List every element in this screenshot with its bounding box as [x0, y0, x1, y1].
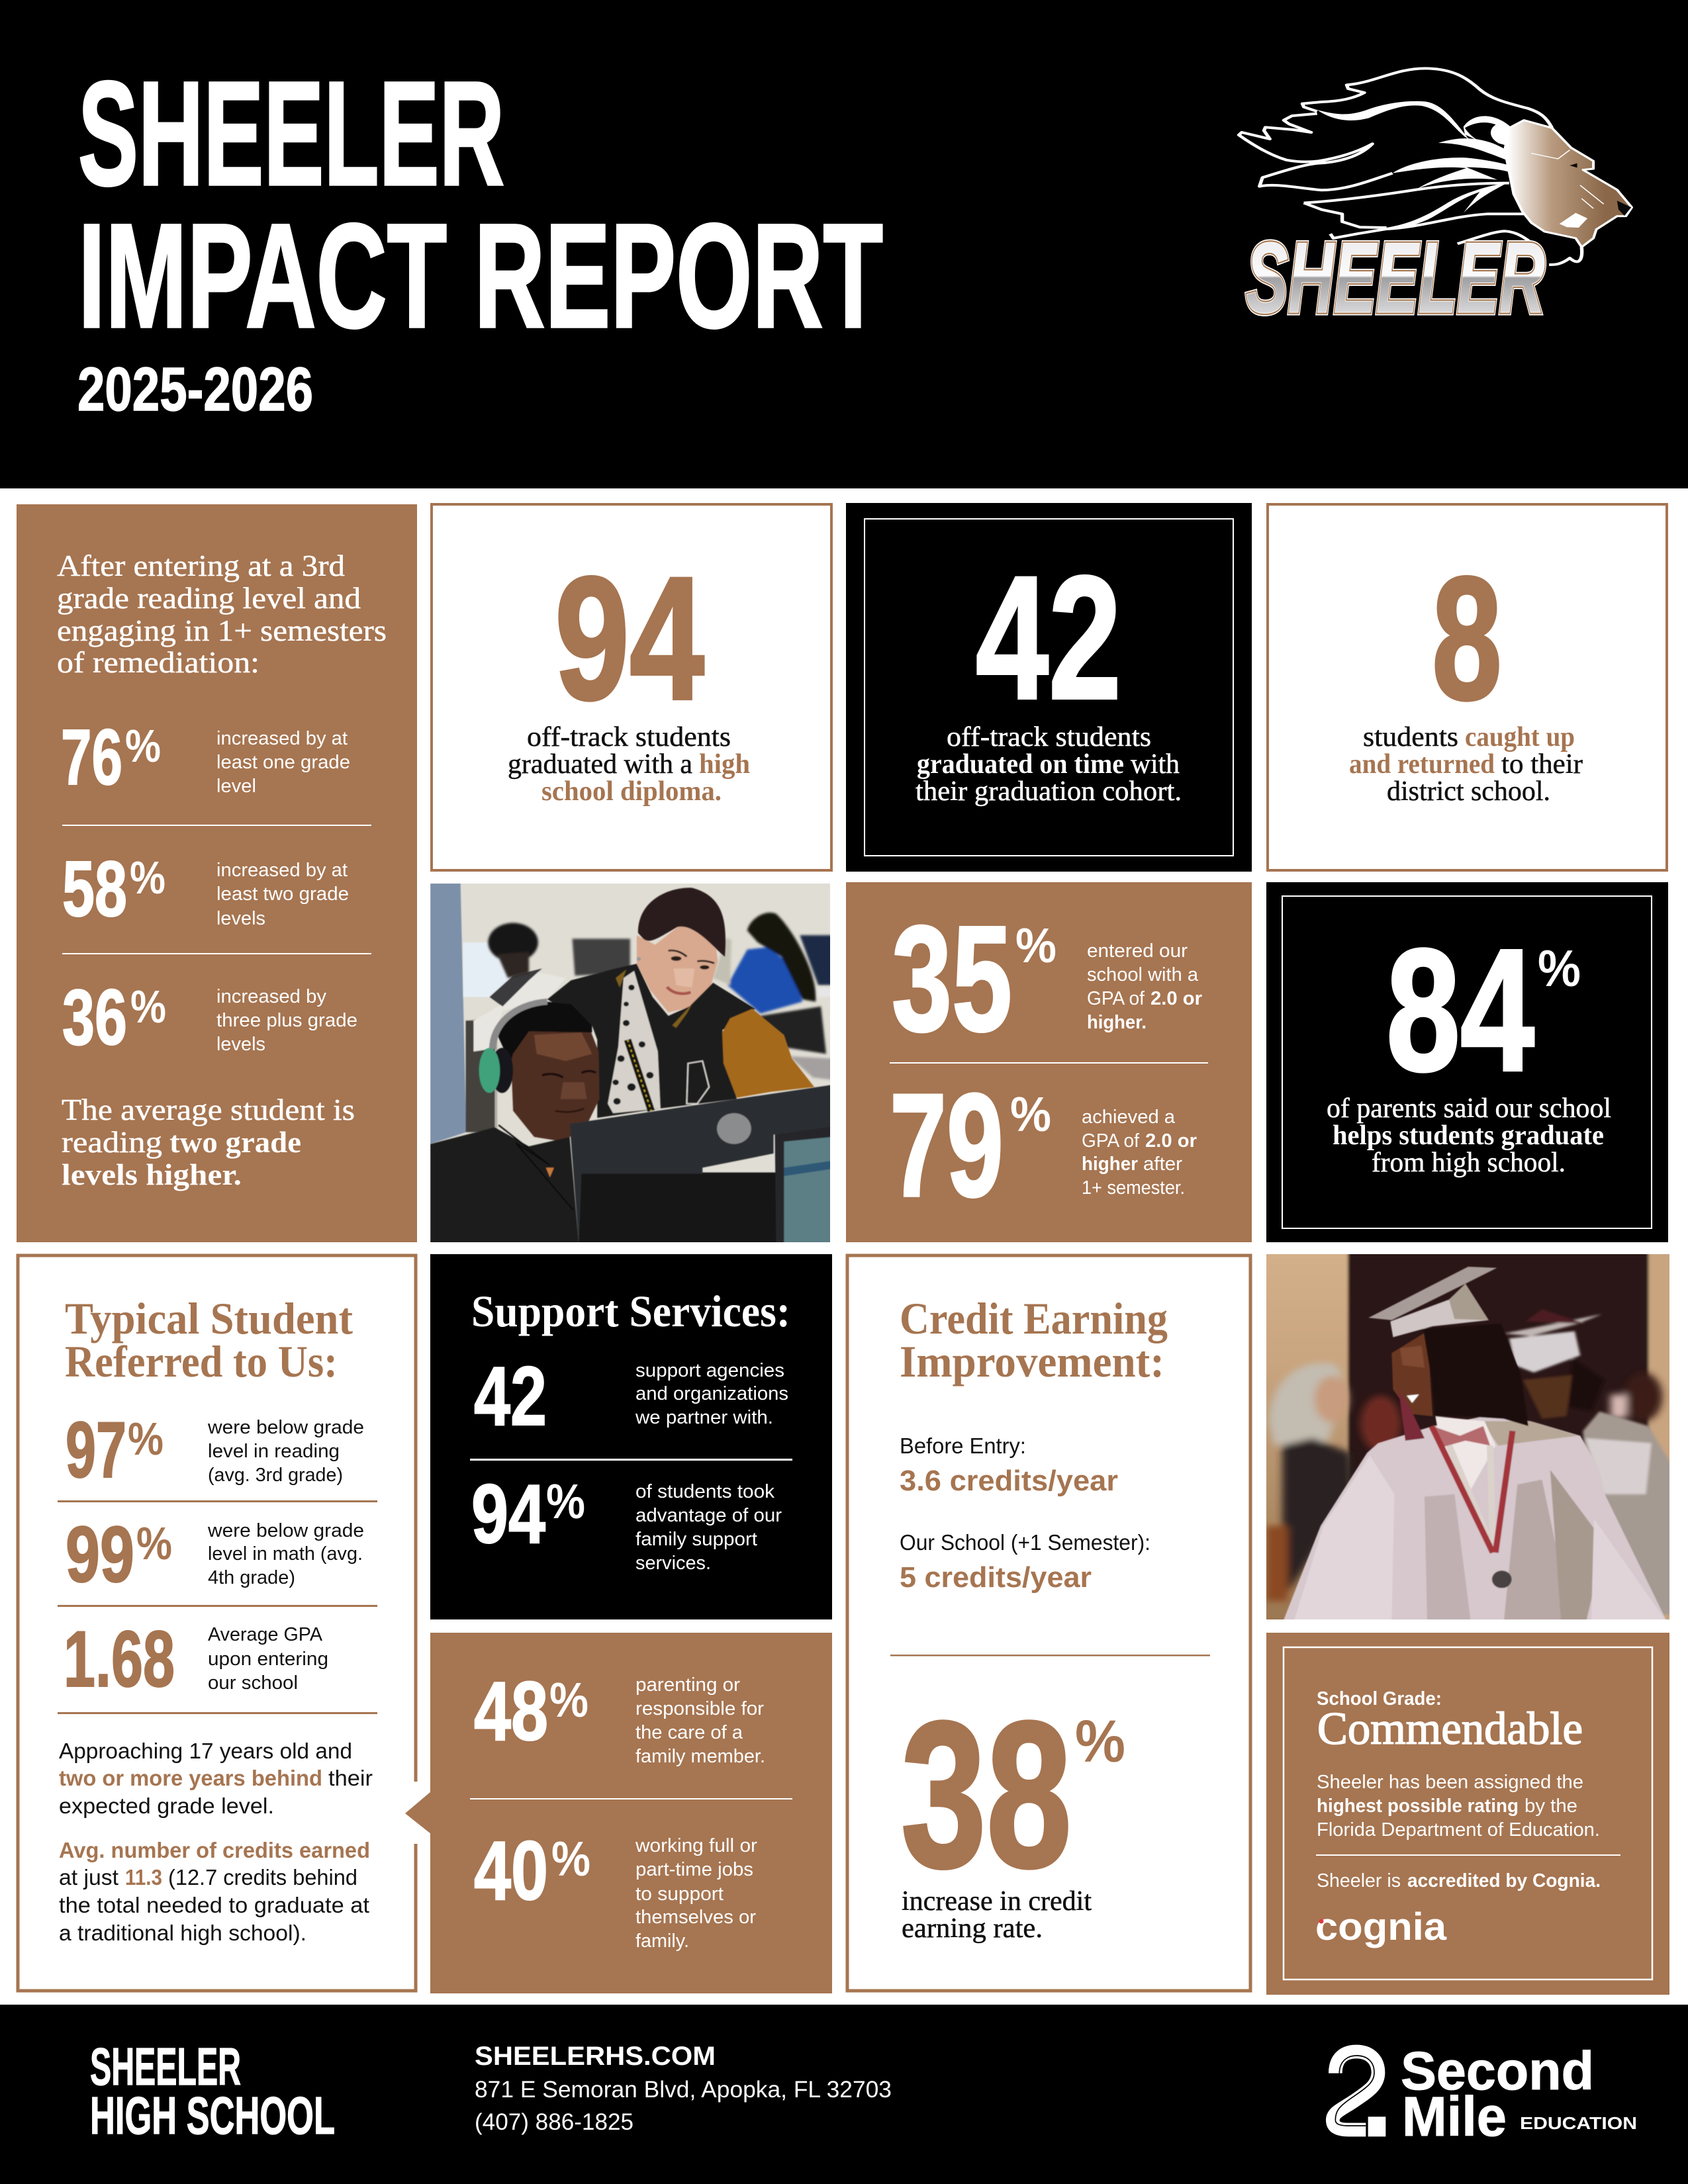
text: average student: two grade: [169, 1125, 301, 1159]
text: our school: 5 credits/year: [900, 1561, 1092, 1594]
text: our school: Our School (+1 Semester):: [900, 1530, 1150, 1555]
footer: school name: HIGH SCHOOL: [90, 2086, 335, 2145]
text: caught up: students: [1363, 722, 1458, 752]
text: age and years behind: two or more years behind: [59, 1766, 322, 1790]
stat: 42 agencies: and organizations: [635, 1383, 788, 1404]
stat: 94% family support: advantage of our: [635, 1505, 782, 1526]
stat: 94% family support: [471, 1467, 782, 1574]
stat: 36%: %: [130, 981, 166, 1032]
footer: contact details: 871 E Semoran Blvd, Apopka, FL 32703: [475, 2077, 892, 2103]
stat: 35%: entered our: [1087, 940, 1188, 962]
text: credits earned: Avg. number of credits earned: [59, 1838, 370, 1862]
panel: reading gains: [17, 504, 417, 1242]
text: caught up: [1349, 722, 1583, 807]
stat: 42 agencies: 42: [474, 1349, 547, 1443]
number: 42: 42: [976, 540, 1121, 736]
heading: reading gains: engaging in 1+ semesters: [57, 614, 387, 647]
text: caught up: to their: [1501, 749, 1583, 780]
stat: 58%: [62, 845, 349, 933]
text: parents: from high school.: [1372, 1148, 1566, 1178]
text: parents: [1327, 1093, 1611, 1178]
stat: 35%: higher.: [1087, 1012, 1147, 1033]
text: highest rating: Florida Department of Education.: [1317, 1819, 1600, 1841]
stat: 94% family support: of students took: [635, 1481, 775, 1502]
heading: credit earning: [900, 1293, 1168, 1387]
footer: contact details: SHEELERHS.COM: [475, 2042, 716, 2071]
stat: 48%: the care of a: [635, 1722, 743, 1743]
stat: 79%: GPA of: [1082, 1130, 1140, 1152]
stat: 79%: 2.0 or: [1145, 1130, 1197, 1152]
stat: 76%: 76: [61, 713, 122, 801]
photo: teacher helping student at computer: [430, 883, 834, 1246]
stat: 76%: [61, 713, 350, 801]
stat: 1.68 GPA: our school: [208, 1672, 298, 1694]
stat: 40%: part-time jobs: [635, 1859, 753, 1880]
text: increase in credit earning: earning rate.: [902, 1913, 1043, 1944]
text: school grade: School Grade:: [1317, 1688, 1442, 1709]
stat: 58%: %: [130, 852, 165, 903]
stat: 94% family support: services.: [635, 1553, 711, 1574]
text: average student: levels higher.: [62, 1158, 242, 1191]
logo: Sheeler lion: [1239, 68, 1632, 334]
stat: 58%: 58: [62, 845, 127, 933]
text: increase in credit earning: [902, 1886, 1092, 1944]
panel: school grade: [1266, 1633, 1669, 1995]
stat: 58%: least two grade: [216, 884, 349, 905]
stat: 94% family support: %: [546, 1474, 585, 1529]
text: off-track graduates: high: [699, 749, 750, 780]
title: SHEELER: [78, 51, 504, 216]
logo: Cognia: cognia: [1315, 1905, 1447, 1948]
text: off-track graduates: graduated with a: [508, 749, 692, 780]
text: on-time graduates: [915, 722, 1182, 807]
stat: 40%: [474, 1824, 757, 1952]
stat: 79%: [890, 1064, 1197, 1228]
stat: 35%: 2.0 or: [1150, 988, 1202, 1009]
stat: 40%: family.: [635, 1931, 689, 1952]
stat: 40%: %: [551, 1831, 590, 1886]
heading: reading gains: grade reading level and: [57, 581, 361, 615]
stat: 48%: %: [549, 1672, 588, 1727]
text: increase in credit earning: increase in credit: [902, 1886, 1092, 1917]
header band: [0, 0, 1688, 488]
text: accreditation: accredited by Cognia.: [1407, 1870, 1601, 1891]
text: parents: helps students graduate: [1333, 1120, 1604, 1151]
stat: 99%: 4th grade): [208, 1567, 295, 1588]
stat: 58%: increased by at: [216, 860, 348, 881]
panel: GPA stats: [846, 882, 1252, 1242]
text: age and years behind: expected grade level.: [59, 1794, 274, 1818]
stat: 36%: [62, 974, 357, 1062]
text: off-track graduates: [508, 722, 750, 807]
text: average student: [62, 1093, 355, 1191]
logo: Second Mile Education: Second: [1401, 2041, 1594, 2101]
stat: 48%: 48: [474, 1664, 548, 1758]
icon: second mile mark: [1333, 2052, 1385, 2136]
text: average student: reading: [62, 1125, 162, 1159]
stat: 99%: level in math (avg.: [208, 1543, 363, 1565]
stat: 48%: [474, 1664, 765, 1767]
text: before entry: Before Entry:: [900, 1433, 1026, 1458]
stat: 97%: level in reading: [208, 1441, 340, 1462]
stat: 35%: [892, 895, 1202, 1063]
text: on-time graduates: with: [1131, 749, 1180, 780]
stat: 97%: %: [128, 1413, 164, 1465]
heading: credit earning: Improvement:: [900, 1336, 1164, 1387]
number: 38%: %: [1075, 1709, 1125, 1775]
stat: 99%: 99: [66, 1510, 134, 1599]
stat: 79%: 79: [890, 1064, 1004, 1228]
text: parents: of parents said our school: [1327, 1093, 1611, 1124]
text: credits earned: [59, 1838, 370, 1945]
heading: typical student: Referred to Us:: [65, 1336, 338, 1387]
panel: support services: [430, 1254, 832, 1619]
stat: 48%: parenting or: [635, 1674, 740, 1696]
text: credits earned: (12.7 credits behind: [168, 1865, 357, 1889]
stat: 35%: 35: [892, 895, 1012, 1063]
text: credits earned: 11.3: [125, 1865, 162, 1889]
text: average student: The average student is: [62, 1093, 355, 1126]
heading: reading gains: of remediation:: [57, 645, 259, 679]
text: caught up: caught up: [1465, 722, 1575, 752]
stat: 35%: GPA of: [1087, 988, 1145, 1009]
heading: credit earning: Credit Earning: [900, 1293, 1168, 1343]
panel: family responsibilities: [405, 1633, 832, 1993]
stat: 40%: themselves or: [635, 1907, 756, 1928]
title: [78, 51, 883, 359]
stat: 1.68 GPA: Average GPA: [208, 1624, 323, 1645]
number: 94: 94: [555, 541, 705, 737]
stat: 97%: [66, 1406, 364, 1494]
stat: 1.68 GPA: 1.68: [64, 1615, 175, 1704]
footer: contact details: (407) 886-1825: [475, 2109, 633, 2135]
logo wordmark: [1246, 222, 1545, 334]
heading: reading gains: [57, 549, 387, 679]
text: age and years behind: their: [328, 1766, 373, 1790]
stat: 35%: %: [1015, 918, 1056, 973]
stat: 76%: least one grade: [216, 752, 350, 773]
text: age and years behind: Approaching 17 years old and: [59, 1739, 352, 1763]
stat: 36%: increased by: [216, 986, 326, 1007]
stat: 36%: 36: [62, 974, 127, 1062]
number: 8: 8: [1432, 541, 1502, 737]
photo: graduate in cap and gown: [1263, 1252, 1679, 1627]
footer: school name: SHEELER: [90, 2037, 241, 2096]
panel: 94 graduates: [432, 504, 831, 870]
stat: 79%: 1+ semester.: [1082, 1177, 1185, 1199]
stat: 42 agencies: support agencies: [635, 1360, 784, 1381]
panel: typical student: [18, 1255, 416, 1991]
stat: 76%: %: [125, 720, 161, 772]
subtitle: year: 2025-2026: [77, 355, 313, 424]
stat: 48%: responsible for: [635, 1698, 764, 1719]
text: off-track graduates: off-track students: [527, 722, 731, 752]
stat: 42 agencies: we partner with.: [635, 1407, 773, 1428]
text: highest rating: by the: [1524, 1796, 1577, 1817]
stat: 40%: 40: [474, 1824, 548, 1917]
stat: 99%: were below grade: [207, 1520, 364, 1541]
text: off-track graduates: school diploma.: [541, 776, 722, 807]
stat: 97%: (avg. 3rd grade): [208, 1465, 343, 1486]
panel: 84% parents: [1266, 882, 1668, 1242]
footer: contact details: [475, 2042, 892, 2135]
stat: 58%: levels: [216, 908, 265, 929]
text: on-time graduates: their graduation cohort.: [915, 776, 1182, 807]
number: 38%: 38: [901, 1678, 1072, 1911]
text: caught up: district school.: [1387, 776, 1550, 807]
text: accreditation: [1317, 1870, 1601, 1891]
stat: 36%: levels: [216, 1034, 265, 1055]
text: credits earned: the total needed to graduate at: [59, 1893, 369, 1917]
stat: 79%: achieved a: [1082, 1107, 1176, 1128]
stat: 40%: to support: [635, 1884, 724, 1905]
panel: credit earning improvement: [847, 1255, 1250, 1991]
stat: 79%: after: [1143, 1154, 1182, 1175]
logo: Second Mile Education: [1333, 2041, 1637, 2148]
stat: 40%: working full or: [635, 1835, 757, 1856]
text: on-time graduates: graduated on time: [917, 749, 1124, 780]
text: credits earned: a traditional high school).: [59, 1921, 306, 1945]
stat: 99%: [66, 1510, 364, 1599]
text: before entry: [900, 1433, 1118, 1497]
heading: support services: Support Services:: [471, 1286, 790, 1336]
text: credits earned: at just: [59, 1865, 118, 1889]
stat: 76%: increased by at: [216, 728, 348, 749]
text: caught up: and returned: [1349, 749, 1495, 780]
logo: Second Mile Education: Mile: [1402, 2085, 1507, 2148]
text: accreditation: Sheeler is: [1317, 1870, 1401, 1891]
stat: 97%: were below grade: [207, 1417, 364, 1438]
title: IMPACT REPORT: [78, 193, 883, 359]
text: age and years behind: [59, 1739, 373, 1818]
heading: typical student: Typical Student: [65, 1293, 353, 1343]
stat: 1.68 GPA: upon entering: [208, 1649, 328, 1670]
text: highest rating: [1317, 1772, 1600, 1841]
arrow: callout pointer: [405, 1792, 431, 1834]
text: highest rating: Sheeler has been assigned the: [1317, 1772, 1583, 1793]
stat: 97%: 97: [66, 1406, 126, 1494]
stat: 79%: higher: [1082, 1154, 1138, 1175]
stat: 79%: %: [1010, 1087, 1051, 1142]
stat: 94% family support: 94: [471, 1467, 545, 1561]
footer: school name: [90, 2037, 335, 2145]
text: our school: [900, 1530, 1150, 1594]
heading: reading gains: After entering at a 3rd: [57, 549, 345, 582]
panel: 8 returned: [1268, 504, 1667, 870]
stat: 48%: family member.: [635, 1746, 765, 1767]
text: before entry: 3.6 credits/year: [900, 1465, 1118, 1497]
heading: typical student: [65, 1293, 353, 1387]
stat: 76%: level: [216, 776, 256, 797]
number: 84%: %: [1538, 939, 1581, 997]
stat: 94% family support: family support: [635, 1529, 757, 1550]
text: highest rating: highest possible rating: [1317, 1796, 1519, 1817]
text: on-time graduates: off-track students: [947, 722, 1151, 752]
logo: Second Mile Education: EDUCATION: [1520, 2113, 1637, 2133]
footer band: [0, 2005, 1688, 2184]
panel: 42 on time: [846, 503, 1252, 872]
stat: 42 agencies: [474, 1349, 788, 1443]
stat: 36%: three plus grade: [216, 1010, 357, 1031]
text: school grade: Commendable: [1317, 1704, 1583, 1754]
number: 84%: 84: [1386, 913, 1535, 1107]
stat: 99%: %: [136, 1518, 172, 1569]
stat: 1.68 GPA: [64, 1615, 328, 1704]
stat: 35%: school with a: [1087, 964, 1199, 985]
